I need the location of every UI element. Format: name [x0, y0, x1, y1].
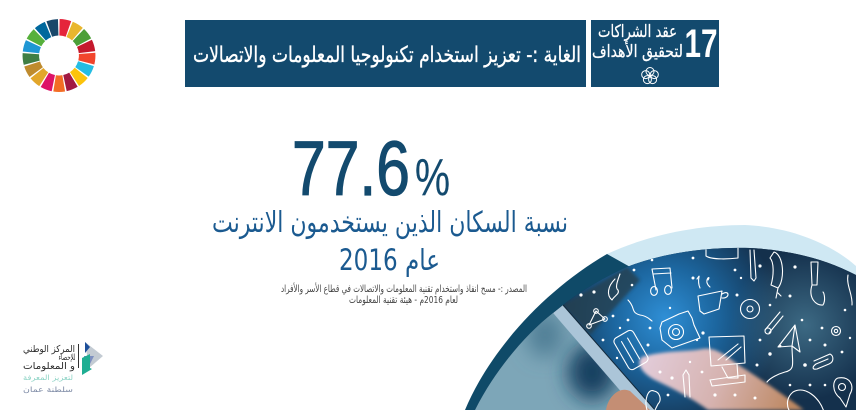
line icons — [587, 248, 852, 410]
big statistic: % — [415, 149, 450, 207]
icon: squiggle pin — [628, 300, 652, 321]
blurred background — [475, 313, 620, 410]
icon: coffee cup — [697, 276, 728, 314]
icon: pencil — [750, 250, 756, 281]
icon: palette — [787, 390, 824, 410]
icon: rounded frame — [706, 248, 738, 259]
finger — [639, 349, 804, 410]
icon: cable — [848, 275, 852, 305]
source note — [281, 282, 527, 306]
tablet dark corner — [563, 267, 640, 335]
goal name line 2: لتحقيق الأهداف — [592, 41, 683, 62]
panel: goal banner — [185, 20, 586, 87]
hand lower left — [606, 390, 650, 410]
source note: المصدر :- مسح انفاذ واستخدام تقنية المعلومات والاتصالات في قطاع الأسر والأفراد — [281, 282, 527, 295]
logo text: للإحصاء — [58, 353, 76, 363]
icon: partnership rosette — [642, 68, 658, 84]
big statistic: 77.6 — [292, 126, 410, 212]
logo tagline: لتعزيز المعرفة — [23, 373, 73, 382]
icon: disc — [740, 300, 760, 318]
icon: speech pin — [834, 378, 852, 407]
icon: at sign — [832, 326, 840, 336]
statistic description: نسبة السكان الذين يستخدمون الانترنت — [212, 205, 568, 239]
tablet edge — [553, 305, 655, 410]
icon: camera — [660, 311, 700, 348]
panel: goal 17 badge — [591, 20, 719, 87]
icon: paper plane — [767, 325, 800, 382]
logo text: المركز الوطني — [23, 344, 75, 355]
logo text: و المعلومات — [23, 361, 75, 372]
icon: clip — [813, 354, 833, 369]
icon: share nodes — [589, 311, 605, 325]
statistic description — [212, 205, 568, 277]
illustration: tablet with hand — [465, 225, 856, 410]
icon: phone handset — [770, 252, 783, 298]
icon: brush — [608, 274, 620, 300]
source note: لعام 2016م - هيئة تقنية المعلومات — [349, 295, 458, 306]
logo country: سلطنة عمان — [23, 385, 73, 394]
heading: goal title: الغاية :- تعزيز استخدام تكنولوجيا المعلومات والاتصالات — [193, 43, 581, 68]
logo text — [23, 344, 76, 372]
icon: music note — [652, 268, 672, 290]
tablet screen — [553, 248, 856, 322]
statistic description: عام 2016 — [339, 243, 440, 277]
navy band — [465, 254, 632, 410]
icon: tablet device — [612, 329, 650, 371]
icon: computer monitor — [709, 336, 745, 386]
logo mark — [82, 342, 103, 375]
logo: national centre for statistics and information — [23, 342, 103, 394]
scattered dots — [579, 251, 851, 400]
light blue arc — [600, 225, 856, 410]
goal name line 1: عقد الشراكات — [598, 22, 677, 42]
icon: SDG colour wheel — [19, 16, 99, 95]
icon: heart — [646, 391, 660, 410]
icon: watch — [811, 262, 825, 305]
icon: pen — [683, 370, 690, 397]
goal number: 17 — [684, 22, 718, 66]
icon: safety pin — [765, 312, 783, 333]
